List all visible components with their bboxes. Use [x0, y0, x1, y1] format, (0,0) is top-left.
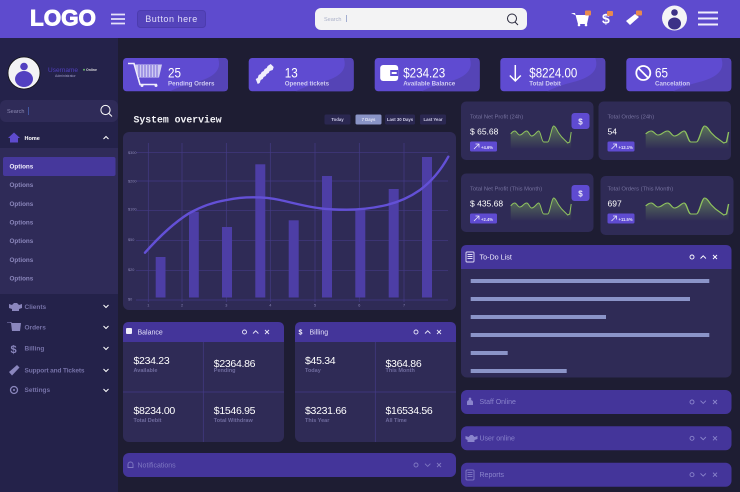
menu item: orders — [7, 322, 108, 332]
x axis labels: 5 — [314, 304, 316, 308]
options panel: Options — [10, 182, 34, 189]
x axis labels: 2 — [181, 304, 183, 308]
icon: header dollar: $ — [602, 10, 610, 26]
panel: balance: $234.23 — [134, 355, 170, 367]
card: total net profit 24h — [461, 102, 594, 160]
y axis labels: $200 — [128, 180, 136, 184]
card: total net profit 24h: Total Net Profit (24h) — [470, 114, 523, 120]
card: total orders this month — [600, 176, 734, 235]
options panel: Options — [10, 257, 34, 264]
sidebar search — [0, 100, 118, 122]
range button: last 30 days — [385, 114, 415, 124]
stat card: cancelation: Cancelation — [655, 80, 690, 88]
panel: billing: $45.34 — [305, 355, 336, 367]
stat card: opened tickets: Opened tickets — [285, 80, 330, 88]
range button: last year: Last Year — [423, 117, 443, 122]
menu item: settings — [10, 386, 108, 394]
panel: balance: Total Debit — [134, 418, 162, 424]
panel: balance: Pending — [214, 368, 236, 374]
options panel — [0, 148, 118, 294]
change badge: +11.5% — [618, 217, 633, 222]
panel: to-do list — [461, 245, 732, 378]
range button: today: Today — [331, 117, 344, 122]
panel: billing: Billing — [310, 330, 328, 336]
menu item: home — [8, 132, 108, 142]
sidebar user profile: Online — [86, 68, 97, 72]
panel: balance: $2364.86 — [214, 358, 256, 370]
sparkline — [511, 126, 571, 149]
menu item: billing: $ — [10, 344, 17, 356]
panel: balance: Balance — [138, 330, 163, 336]
header button: Button here — [145, 14, 198, 24]
x axis labels — [147, 304, 405, 308]
card: total orders 24h: Total Orders (24h) — [608, 114, 654, 120]
stat card: opened tickets — [249, 58, 354, 91]
panel: balance — [123, 322, 284, 442]
header search box: Search — [324, 17, 341, 23]
panel: reports — [461, 463, 732, 487]
card: total net profit this month — [461, 174, 594, 232]
stat card: cancelation: 65 — [655, 64, 668, 80]
dollar button: $ — [578, 190, 583, 198]
menu item: clients: Clients — [24, 304, 47, 311]
panel: balance: Total Withdraw — [214, 418, 253, 424]
header bar — [0, 0, 740, 38]
menu item: billing: Billing — [24, 346, 44, 352]
panel: user online: User online — [480, 436, 515, 442]
icon: prohibited — [636, 66, 650, 80]
change badge: +2.4% — [481, 217, 493, 222]
sidebar user profile: Username — [48, 67, 78, 74]
card: total orders 24h: 54 — [608, 126, 617, 136]
x axis labels: 1 — [147, 304, 149, 308]
panel: balance: $8234.00 — [134, 405, 175, 417]
panel: billing: $3231.66 — [305, 405, 347, 417]
y axis labels: $20 — [128, 268, 134, 272]
menu item: support and tickets — [9, 365, 108, 376]
icon: header hamburger — [698, 12, 718, 24]
icon: header cart — [571, 10, 591, 26]
icon: header avatar — [662, 6, 687, 30]
panel: billing — [295, 322, 456, 442]
y axis labels — [128, 151, 136, 302]
panel: billing: Today — [305, 368, 322, 374]
sidebar user profile: Administrator — [55, 74, 76, 78]
icon: header menu — [111, 14, 125, 24]
stat card: pending orders: Pending Orders — [168, 80, 215, 88]
sidebar — [0, 38, 118, 492]
options panel: Options — [10, 238, 34, 245]
panel: user online — [461, 426, 732, 450]
stat card: pending orders — [123, 58, 228, 91]
dollar button: $ — [578, 118, 583, 126]
icon: document — [466, 252, 474, 262]
icon: cart — [128, 64, 162, 87]
y axis labels: $0 — [128, 298, 132, 302]
change badge: +4.6% — [481, 145, 493, 150]
header button — [138, 10, 206, 28]
panel controls — [414, 330, 441, 334]
card: total orders 24h — [598, 102, 731, 160]
header search box — [315, 8, 527, 30]
panel: billing: All Time — [386, 418, 407, 424]
panel: staff online — [461, 390, 732, 414]
stat card: available balance: $234.23 — [403, 64, 445, 80]
bars — [156, 157, 432, 298]
menu item: billing — [10, 344, 108, 356]
card: total orders this month: 697 — [608, 198, 622, 208]
range button: 7 days — [356, 114, 382, 124]
y axis labels: $300 — [128, 151, 136, 155]
panel: notifications: Notifications — [138, 462, 176, 470]
logo: LOGO — [30, 6, 96, 30]
stat card: available balance: Available Balance — [403, 80, 456, 88]
sidebar search: Search — [7, 109, 24, 115]
chart: system overview — [123, 132, 456, 310]
panel controls — [242, 330, 269, 334]
menu item: clients — [9, 303, 108, 311]
panel: billing: $364.86 — [386, 358, 422, 370]
x axis labels: 7 — [403, 304, 405, 308]
x axis labels: 3 — [225, 304, 227, 308]
icon: wallet small — [126, 328, 132, 334]
panel controls — [690, 255, 717, 259]
panel: balance: Available — [134, 368, 157, 374]
card: total net profit this month: $ 435.68 — [470, 198, 503, 208]
options panel: Options — [10, 276, 34, 282]
panel: billing: $16534.56 — [386, 405, 433, 417]
menu item: settings: Settings — [24, 387, 51, 394]
icon: wallet — [380, 65, 398, 81]
y axis labels: $50 — [128, 238, 134, 242]
trend line — [145, 157, 448, 253]
stat card: total debit: Total Debit — [529, 80, 561, 88]
menu item: support and tickets: Support and Tickets — [24, 368, 85, 374]
panel: balance: $1546.95 — [214, 405, 256, 417]
panel: billing: This Month — [386, 368, 415, 374]
sparkline — [511, 198, 571, 221]
menu item: orders: Orders — [24, 324, 46, 332]
stat card: available balance — [375, 58, 480, 91]
card: total net profit this month: Total Net Profit (This Month) — [470, 186, 542, 192]
sparkline — [646, 198, 729, 221]
active option — [3, 157, 116, 176]
stat card: pending orders: 25 — [168, 64, 181, 80]
range button: 7 days: 7 Days — [362, 117, 376, 122]
task lines — [471, 279, 709, 373]
options panel: Options — [10, 201, 34, 208]
icon: ticket — [256, 64, 274, 84]
stat card: cancelation — [626, 58, 731, 91]
card: total orders this month: Total Orders (This Month) — [608, 186, 673, 192]
panel: reports: Reports — [480, 472, 505, 479]
panel: staff online: Staff Online — [480, 399, 516, 406]
panel: billing: This Year — [305, 418, 330, 424]
range button: last year — [420, 114, 446, 124]
menu item: home: Home — [24, 136, 40, 142]
panel: notifications — [123, 453, 456, 477]
change badge: +13.1% — [618, 145, 633, 150]
stat card: total debit — [500, 58, 605, 91]
stat card: total debit: $8224.00 — [529, 64, 577, 80]
icon: header ticket — [626, 10, 642, 25]
x axis labels: 4 — [269, 304, 271, 308]
sparkline — [646, 126, 729, 149]
range button: last 30 days: Last 30 Days — [387, 117, 414, 122]
active option: Options — [10, 164, 34, 170]
range button: today — [324, 114, 350, 124]
stat card: opened tickets: 13 — [285, 64, 298, 80]
y axis labels: $100 — [128, 208, 136, 212]
icon: dollar small: $ — [298, 330, 302, 336]
heading: system overview: System overview — [134, 114, 222, 126]
card: total net profit 24h: $ 65.68 — [470, 126, 499, 136]
x axis labels: 6 — [358, 304, 360, 308]
options panel: Options — [10, 220, 34, 226]
icon: down arrow — [510, 65, 521, 81]
panel: to-do list: To-Do List — [480, 252, 512, 262]
sidebar user profile — [8, 57, 97, 89]
